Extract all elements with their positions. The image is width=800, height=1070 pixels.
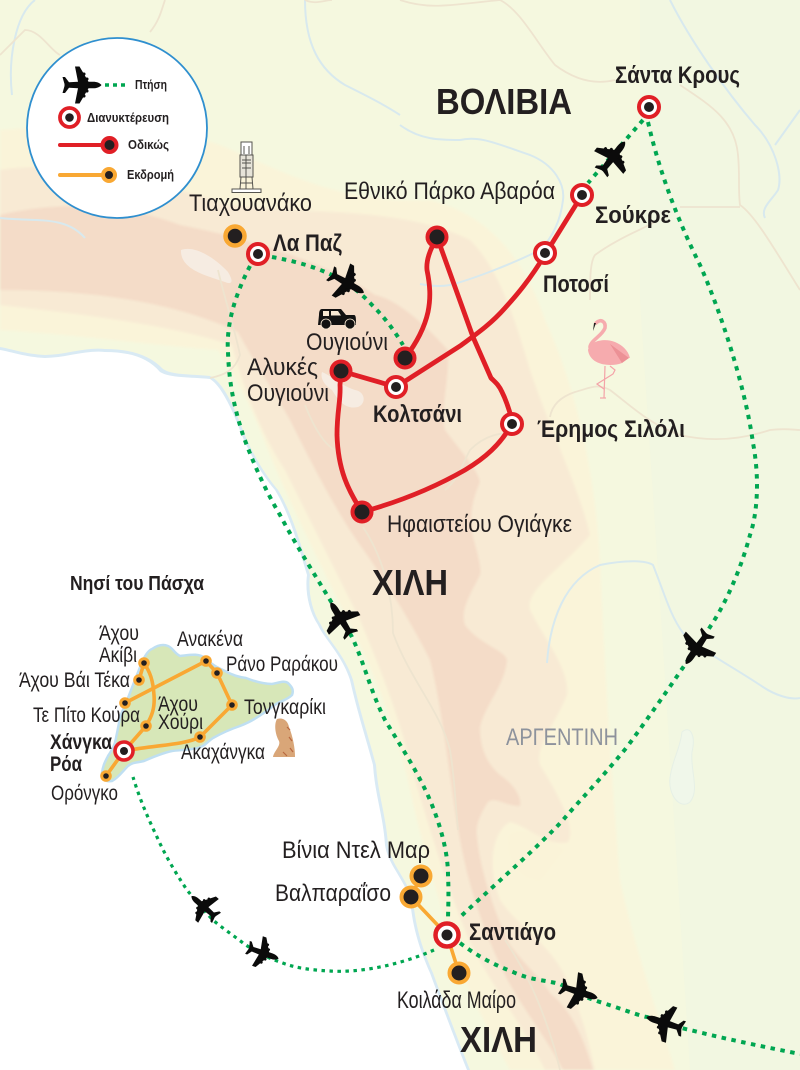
text: Κολτσάνι: Κολτσάνι <box>373 401 462 428</box>
icon: plane south-east 1 <box>555 968 603 1016</box>
icon: plane south-east 2 <box>641 999 689 1047</box>
road route: Sucre Potosi Koltsani <box>396 195 582 387</box>
stop: La Paz <box>248 244 268 264</box>
text: ΒΟΛΙΒΙΑ: ΒΟΛΙΒΙΑ <box>436 81 572 122</box>
text: Ράνο Ραράκου: Ράνο Ραράκου <box>226 653 338 676</box>
text: Χάνγκα: Χάνγκα <box>50 731 112 754</box>
text: Αλυκές: Αλυκές <box>247 354 318 381</box>
road route: Avaroa to Uyuni <box>405 237 437 358</box>
text: Άχου Βάι Τέκα: Άχου Βάι Τέκα <box>19 669 130 692</box>
legend: excursion: Εκδρομή <box>127 167 174 182</box>
icon: plane Pacific 1 <box>181 884 227 930</box>
text: Τονγκαρίκι: Τονγκαρίκι <box>244 696 326 719</box>
text: Ορόνγκο: Ορόνγκο <box>51 782 118 805</box>
icon: flamingo <box>588 321 630 398</box>
stop: Tiwanaku <box>226 226 244 246</box>
stop: Alykes Uyuni <box>332 362 350 380</box>
icon: jeep <box>318 309 356 329</box>
text: Σαντιάγο: Σαντιάγο <box>469 919 556 946</box>
icon: plane Pacific 2 <box>242 933 284 973</box>
stop: Siloli <box>502 414 522 434</box>
excursion routes: Santiago <box>411 876 459 973</box>
icon: plane Chile coast <box>315 593 367 645</box>
legend: flight: Πτήση <box>135 77 167 92</box>
stop: Potosi <box>535 243 555 263</box>
stop: Hanga Roa <box>115 742 133 760</box>
road route: Alykes to Koltsani <box>341 371 396 387</box>
text: Ρόα: Ρόα <box>50 753 82 776</box>
text: Ακίβι: Ακίβι <box>99 644 137 667</box>
icon: moai <box>273 718 295 757</box>
Easter Island stops <box>102 657 236 780</box>
panel: Easter Island <box>102 645 293 781</box>
text: Έρημος Σιλόλι: Έρημος Σιλόλι <box>537 416 685 443</box>
flight route: La Paz to Uyuni <box>272 257 403 345</box>
flight route: La Paz to Santiago <box>228 266 448 922</box>
legend: overnight: Διανυκτέρευση <box>87 110 169 125</box>
text: Εθνικό Πάρκο Αβαρόα: Εθνικό Πάρκο Αβαρόα <box>344 178 555 205</box>
text: ΑΡΓΕΝΤΙΝΗ: ΑΡΓΕΝΤΙΝΗ <box>506 724 618 751</box>
text: Ηφαιστείου Ογιάγκε: Ηφαιστείου Ογιάγκε <box>387 511 572 538</box>
flight route: Santa Cruz to Sucre <box>588 120 643 183</box>
legend: by road <box>60 137 169 152</box>
icon: Tiwanaku monolith <box>232 142 261 192</box>
text: Κοιλάδα Μαίρο: Κοιλάδα Μαίρο <box>397 987 516 1014</box>
stop: Santa Cruz <box>639 97 659 117</box>
text: Τιαχουανάκο: Τιαχουανάκο <box>189 190 312 217</box>
legend: by road: Οδικώς <box>128 137 169 152</box>
text: Άχου: Άχου <box>99 622 139 645</box>
text: ΧΙΛΗ south: ΧΙΛΗ <box>460 1019 537 1060</box>
stop: Sucre <box>572 185 592 205</box>
text: Ουγιούνι (salt flats): Ουγιούνι <box>247 380 329 407</box>
flight route: Santa Cruz to Santiago <box>459 122 757 918</box>
text: Βίνια Ντελ Μαρ: Βίνια Ντελ Μαρ <box>282 837 430 864</box>
text: Τε Πίτο Κούρα: Τε Πίτο Κούρα <box>33 704 140 727</box>
icon: plane La Paz <box>321 257 373 309</box>
text: Ανακένα: Ανακένα <box>177 628 243 651</box>
text: Λα Παζ: Λα Παζ <box>273 230 342 257</box>
text: Ποτοσί: Ποτοσί <box>543 271 609 298</box>
text: Χούρι: Χούρι <box>158 711 203 734</box>
road route: Ogiagke to Alykes <box>337 371 362 512</box>
stop: Maipo <box>450 964 468 982</box>
stop: Avaroa <box>428 228 446 246</box>
stop: Koltsani <box>386 377 406 397</box>
legend: flight <box>62 66 167 104</box>
legend: excursion <box>60 167 174 182</box>
legend: overnight <box>60 108 169 127</box>
labels: stop names <box>189 62 740 1060</box>
text: Σούκρε: Σούκρε <box>595 202 671 229</box>
stop: Vina del Mar <box>412 866 430 886</box>
text: Ακαχάνγκα: Ακαχάνγκα <box>181 741 265 764</box>
icon: plane Sucre <box>586 130 640 184</box>
text: Σάντα Κρους: Σάντα Κρους <box>615 62 740 89</box>
road route: Avaroa to Siloli <box>437 237 513 424</box>
text: Άχου (Huri): Άχου <box>158 693 198 716</box>
icon: plane Argentina <box>671 621 723 675</box>
text: ΧΙΛΗ: ΧΙΛΗ <box>372 562 448 603</box>
stop: Ogiagke <box>352 502 372 522</box>
excursion routes: Easter Island <box>106 661 232 776</box>
stop: Santiago <box>436 924 458 946</box>
stop: Valparaiso <box>402 888 420 906</box>
flight route: Santiago south-east <box>460 943 800 1054</box>
text: Ουγιούνι: Ουγιούνι <box>306 329 388 356</box>
text: Βαλπαραΐσο: Βαλπαραΐσο <box>275 880 391 907</box>
road route: Siloli to Ogiagke <box>362 424 512 512</box>
panel: legend <box>27 38 207 218</box>
stop: Uyuni <box>396 348 414 368</box>
heading: Νησί του Πάσχα: Νησί του Πάσχα <box>70 573 205 595</box>
flight route: Santiago to Easter Island <box>133 777 434 971</box>
labels: Easter Island <box>19 573 338 805</box>
